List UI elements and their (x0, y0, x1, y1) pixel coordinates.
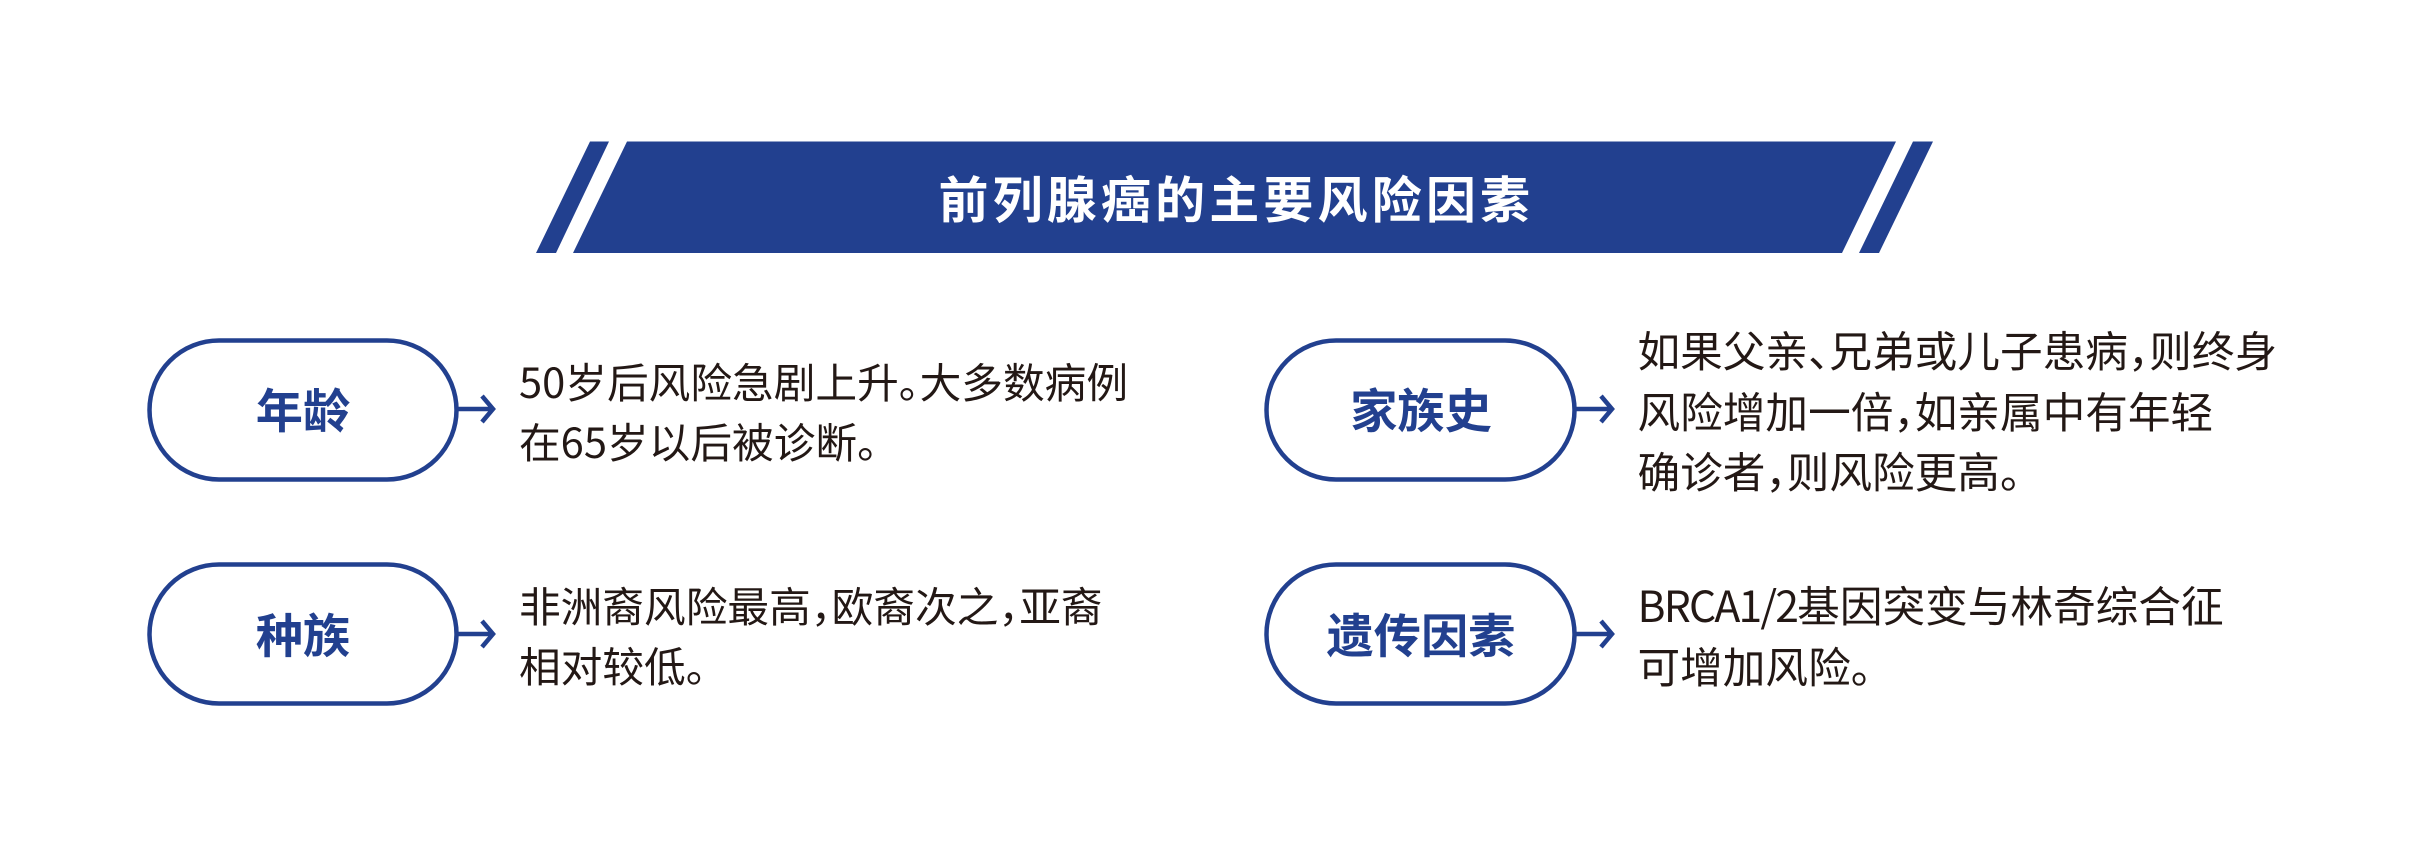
label: family history: 家族史 (1350, 373, 1492, 442)
description: age: 在65岁以后被诊断。 (519, 411, 878, 471)
description: race: 相对较低。 (519, 635, 707, 695)
description: race (519, 575, 1103, 695)
description: family history (1638, 319, 2277, 501)
description: genetic factors: 可增加风险。 (1638, 634, 1872, 696)
description: race: 非洲裔风险最高，欧裔次之，亚裔 (519, 575, 1103, 635)
panel: race (147, 562, 1103, 706)
description: genetic factors (1638, 574, 2224, 696)
description: family history: 确诊者，则风险更高。 (1638, 440, 2021, 501)
panel: family history (1264, 319, 2277, 501)
label: genetic factors: 遗传因素 (1327, 598, 1515, 667)
description: age (519, 351, 1128, 471)
description: family history: 风险增加一倍，如亲属中有年轻 (1638, 380, 2213, 440)
pill: family history (1264, 338, 1615, 482)
description: family history: 如果父亲、兄弟或儿子患病，则终身 (1638, 319, 2277, 380)
panel: age (147, 338, 1128, 482)
label: age: 年龄 (256, 373, 350, 442)
description: genetic factors: BRCA1/2基因突变与林奇综合征 (1638, 574, 2224, 635)
title: 前列腺癌的主要风险因素 (938, 161, 1534, 233)
description: age: 50岁后风险急剧上升。大多数病例 (519, 351, 1128, 411)
pill: race (147, 562, 496, 706)
pill: genetic factors (1264, 562, 1615, 706)
pill: age (147, 338, 496, 482)
label: race: 种族 (256, 598, 350, 667)
panel: genetic factors (1264, 562, 2224, 706)
